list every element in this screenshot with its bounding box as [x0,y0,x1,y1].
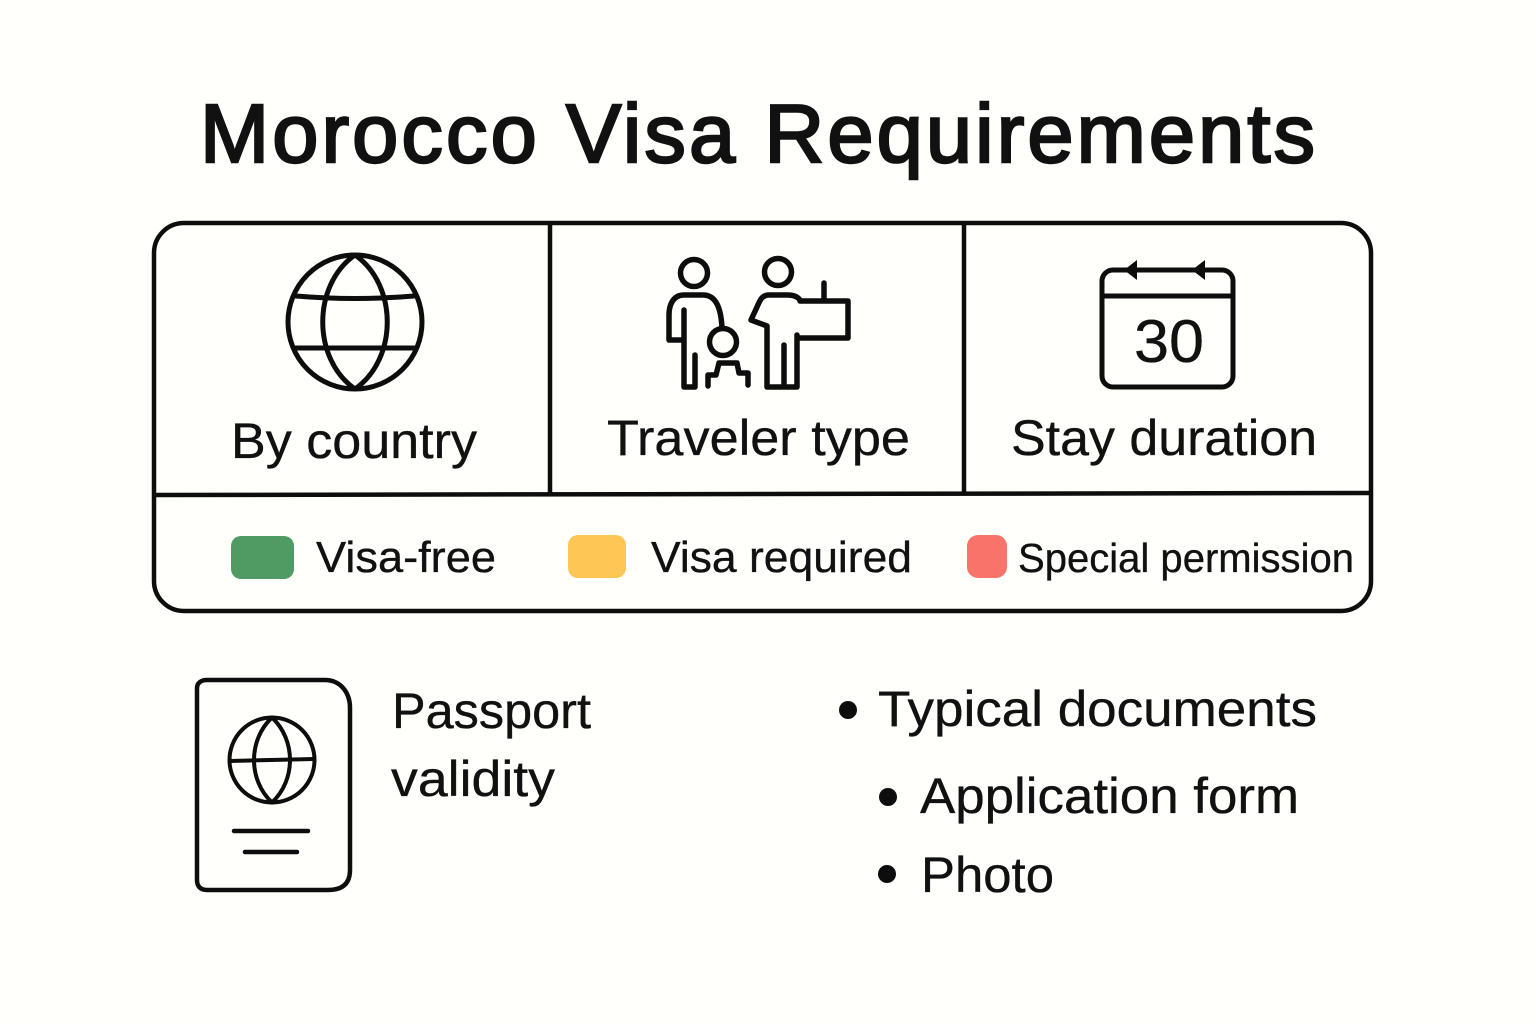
icon: travelers [669,258,848,387]
label: traveler type: Traveler type [607,410,910,466]
label: passport validity: validity [391,751,555,807]
list item: typical documents: Typical documents [878,681,1317,737]
legend: visa required: Visa required [651,533,912,582]
label: passport validity [391,683,591,807]
title: Morocco Visa Requirements [200,87,1315,180]
cell: stay duration [1011,260,1317,466]
cell: by country [231,255,477,469]
label: stay duration: Stay duration [1011,410,1317,466]
passport validity block [197,680,591,890]
icon: calendar: 30 [1134,308,1204,375]
legend: special permission: Special permission [1018,535,1354,581]
list: typical documents [839,681,1317,903]
list item: application form: Application form [920,768,1299,824]
panel: visa factors table [154,223,1371,611]
label: by country: By country [231,413,477,469]
icon: calendar [1102,260,1233,387]
legend: visa-free [231,533,496,582]
legend: visa-free: Visa-free [316,533,496,582]
list item: photo: Photo [921,847,1054,903]
icon: globe [288,255,422,389]
label: passport validity: Passport [392,683,591,739]
cell: traveler type [607,258,910,466]
icon: passport [197,680,350,890]
